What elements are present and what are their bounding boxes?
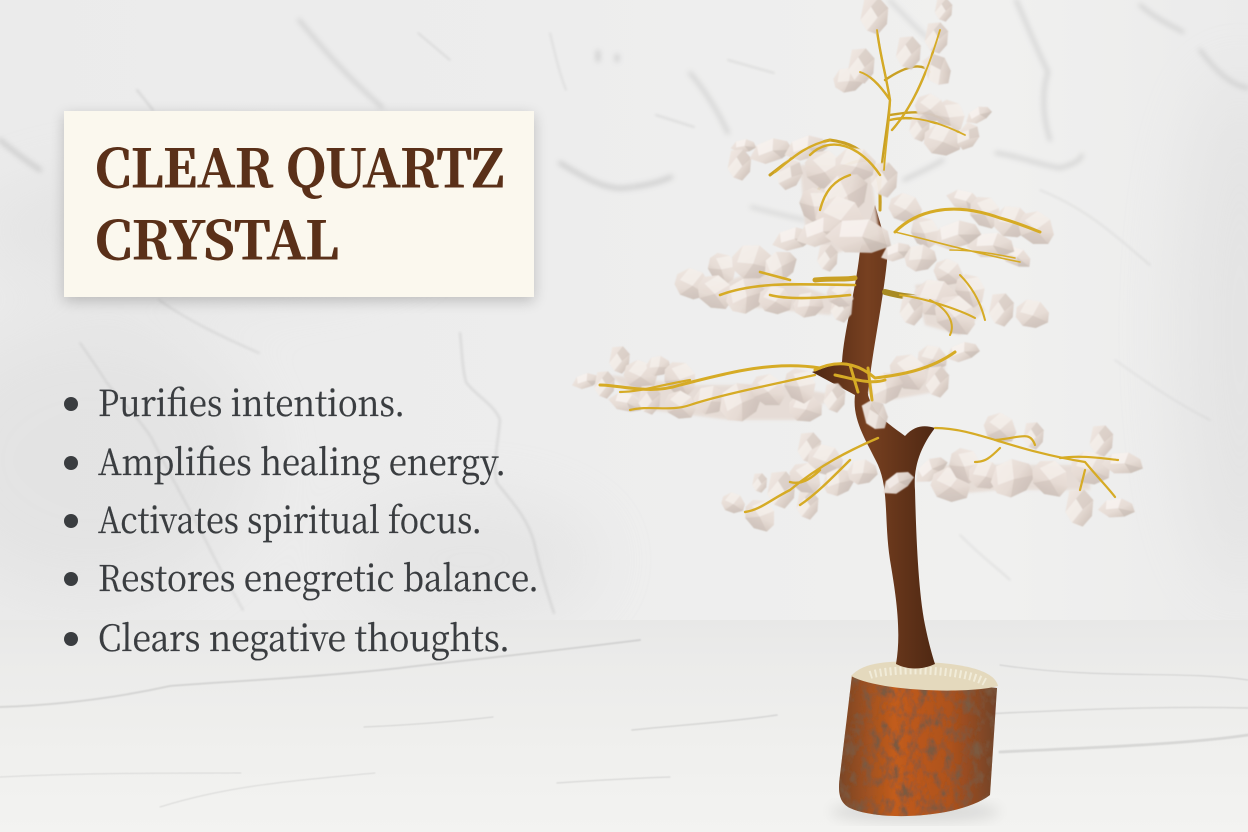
marble wall clouds bbox=[0, 70, 1248, 620]
title panel bbox=[64, 111, 534, 297]
title panel shadow bbox=[64, 115, 534, 301]
bullet: restores: Restores enegretic balance. bbox=[98, 551, 539, 602]
gold wire branches under chips bbox=[770, 30, 965, 297]
bullet: purifies: Purifies intentions. bbox=[98, 376, 405, 427]
crystal tree bbox=[571, 0, 1145, 822]
trunk bbox=[812, 205, 935, 668]
gold wires over chips bbox=[600, 30, 1118, 512]
title heading bbox=[95, 127, 504, 274]
marble table veins bbox=[0, 640, 1248, 807]
title heading: CLEAR QUARTZ bbox=[95, 127, 504, 202]
quartz chip cluster backing bbox=[610, 165, 1090, 495]
marble table surface bbox=[0, 620, 1248, 832]
bullet: activates: Activates spiritual focus. bbox=[98, 493, 482, 544]
base shadow bbox=[830, 802, 1000, 822]
title heading: CRYSTAL bbox=[95, 199, 339, 274]
bullet: amplifies: Amplifies healing energy. bbox=[98, 435, 506, 486]
marble wall background bbox=[0, 0, 1248, 622]
bullet list bbox=[64, 376, 539, 662]
marble wall veins bbox=[0, 0, 1248, 613]
wooden base bbox=[839, 662, 998, 816]
bullet: clears: Clears negative thoughts. bbox=[98, 611, 510, 662]
quartz chips bbox=[571, 0, 1145, 538]
